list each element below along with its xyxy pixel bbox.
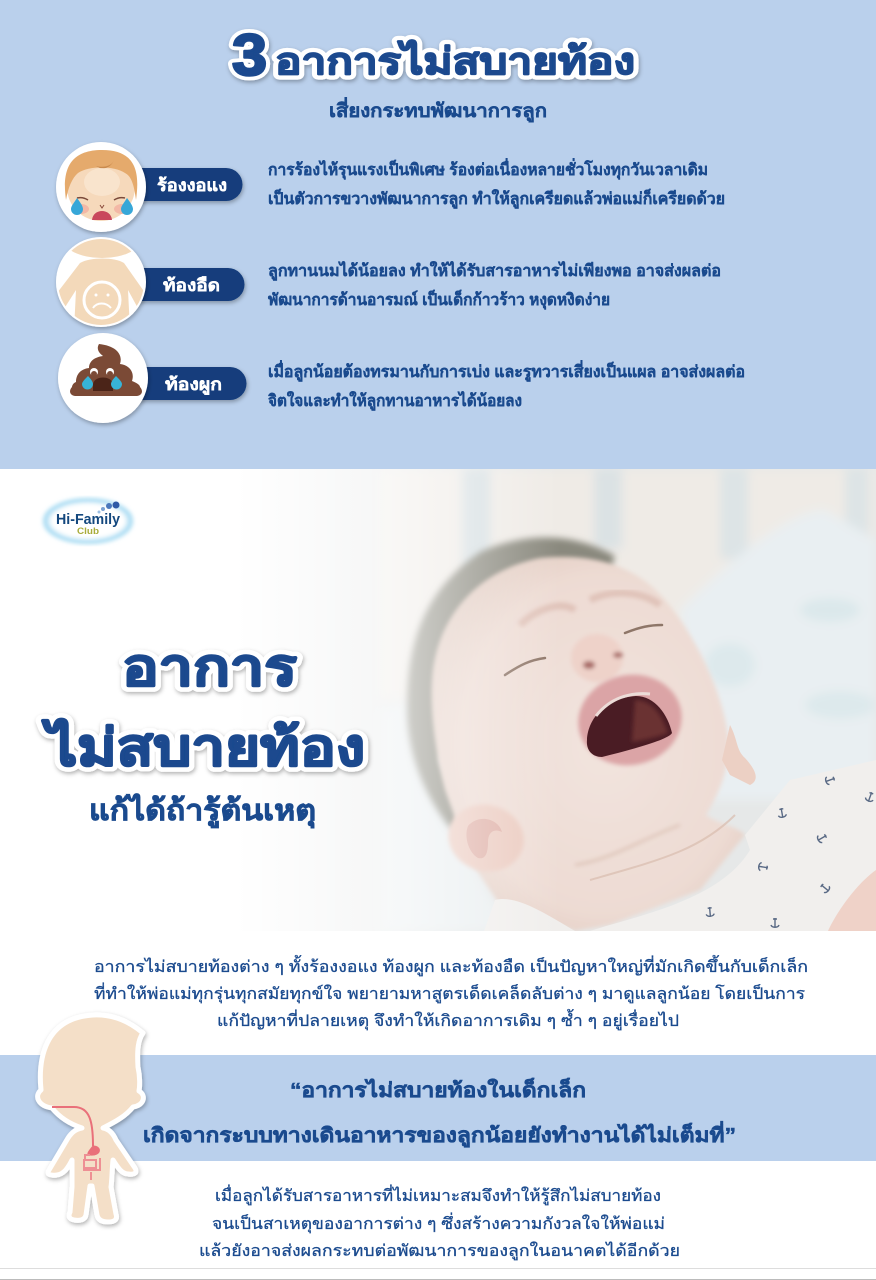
illustration: child with digestive system	[38, 1015, 143, 1222]
label pill: crying: ร้องงอแง	[157, 176, 227, 195]
text block: crying description: เป็นตัวการขวางพัฒนาการลูก ทำให้ลูกเครียดแล้วพ่อแม่ก็เครียดด้วย	[268, 187, 725, 210]
text block: constipation description: เมื่อลูกน้อยต้องทรมานกับการเบ่ง และรูทวารเสี่ยงเป็นแผล อาจส่งผลต่อ	[268, 360, 745, 383]
icon: crying poop	[58, 333, 148, 423]
photo: crying baby	[370, 469, 876, 931]
baby ear	[448, 805, 524, 870]
heading: hero title: ไม่สบายท้อง	[41, 718, 365, 776]
baby chin and neck creases	[575, 815, 735, 880]
subheading: hero: แก้ได้ถ้ารู้ต้นเหตุ	[89, 793, 316, 828]
title: อาการไม่สบายท้อง	[275, 39, 635, 82]
text block: closing paragraph: จนเป็นสาเหตุของอาการต่าง ๆ ซึ่งสร้างความกังวลใจให้พ่อแม่	[212, 1212, 665, 1234]
text block: constipation description	[267, 360, 745, 412]
text block: crying description: การร้องไห้รุนแรงเป็นพิเศษ ร้องต่อเนื่องหลายชั่วโมงทุกวันเวลาเดิม	[268, 158, 708, 180]
text block: intro paragraph: อาการไม่สบายท้องต่าง ๆ ทั้งร้องงอแง ท้องผูก และท้องอืด เป็นปัญหาใหญ่ที่มักเกิดขึ้นกับเด็กเล็ก	[94, 955, 808, 977]
text block: intro paragraph: แก้ปัญหาที่ปลายเหตุ จึงทำให้เกิดอาการเดิม ๆ ซ้ำ ๆ อยู่เรื่อยไป	[217, 1009, 679, 1031]
baby hair	[407, 538, 615, 828]
onesie anchors print	[706, 775, 875, 928]
logo: Hi-Family Club: Hi-Family	[56, 511, 121, 528]
text block: closing paragraph	[199, 1184, 680, 1261]
panel: top blue section	[0, 0, 876, 469]
heading: hero title	[41, 639, 365, 776]
baby nose	[571, 634, 623, 682]
quote: “อาการไม่สบายท้องในเด็กเล็ก	[290, 1077, 586, 1102]
label pill: crying	[130, 168, 242, 201]
title: 3	[232, 23, 267, 88]
baby brow shadows	[520, 593, 660, 625]
title: 3	[232, 23, 267, 88]
text block: bloating description: พัฒนาการด้านอารมณ์ เป็นเด็กก้าวร้าว หงุดหงิดง่าย	[268, 288, 610, 310]
text block: closing paragraph: แล้วยังอาจส่งผลกระทบต่อพัฒนาการของลูกในอนาคตได้อีกด้วย	[199, 1241, 680, 1261]
text block: bloating description	[268, 261, 721, 310]
label pill: constipation: ท้องผูก	[165, 375, 222, 396]
symptom: bloating	[54, 236, 248, 332]
text block: constipation description: จิตใจและทำให้ลูกทานอาหารได้น้อยลง	[267, 391, 522, 412]
heading: hero title: อาการ	[122, 639, 298, 696]
text block: intro paragraph: ที่ทำให้พ่อแม่ทุกรุ่นทุกสมัยทุกข์ใจ พยายามหาสูตรเด็ดเคล็ดลับต่าง ๆ มาดูแลลูกน้อย โดยเป็นการ	[94, 982, 805, 1004]
label pill: bloating	[130, 268, 244, 301]
parent's hand	[828, 870, 876, 931]
symptom: constipation	[58, 333, 246, 423]
icon: crying baby face	[56, 142, 146, 232]
label pill: bloating: ท้องอืด	[163, 275, 220, 295]
quote	[143, 1077, 736, 1149]
baby onesie	[590, 760, 876, 931]
logo: Hi-Family Club: Club	[77, 526, 100, 536]
text block: closing paragraph: เมื่อลูกได้รับสารอาหารที่ไม่เหมาะสมจึงทำให้รู้สึกไม่สบายท้อง	[215, 1184, 661, 1206]
title: อาการไม่สบายท้อง	[275, 39, 635, 82]
quote: เกิดจากระบบทางเดินอาหารของลูกน้อยยังทำงานได้ไม่เต็มที่”	[143, 1120, 736, 1149]
text block: bloating description: ลูกทานนมได้น้อยลง ทำให้ได้รับสารอาหารไม่เพียงพอ อาจส่งผลต่อ	[268, 261, 721, 282]
baby mouth	[576, 672, 684, 768]
baby eyes	[505, 625, 662, 675]
subtitle: เสี่ยงกระทบพัฒนาการลูก	[329, 97, 547, 123]
baby face	[432, 557, 745, 931]
baby hand near shoulder	[722, 725, 756, 785]
symptom: crying	[56, 142, 242, 232]
text block: intro paragraph	[94, 955, 808, 1031]
text block: crying description	[268, 158, 725, 210]
white fade on left of photo	[0, 469, 560, 931]
panel: quote band	[0, 1055, 876, 1161]
label pill: constipation	[130, 367, 246, 400]
icon: belly with sad face	[54, 236, 148, 332]
logo: Hi-Family Club	[45, 500, 131, 542]
title	[232, 23, 635, 88]
heading: hero title: อาการ	[122, 639, 298, 696]
heading: hero title: ไม่สบายท้อง	[41, 718, 365, 776]
